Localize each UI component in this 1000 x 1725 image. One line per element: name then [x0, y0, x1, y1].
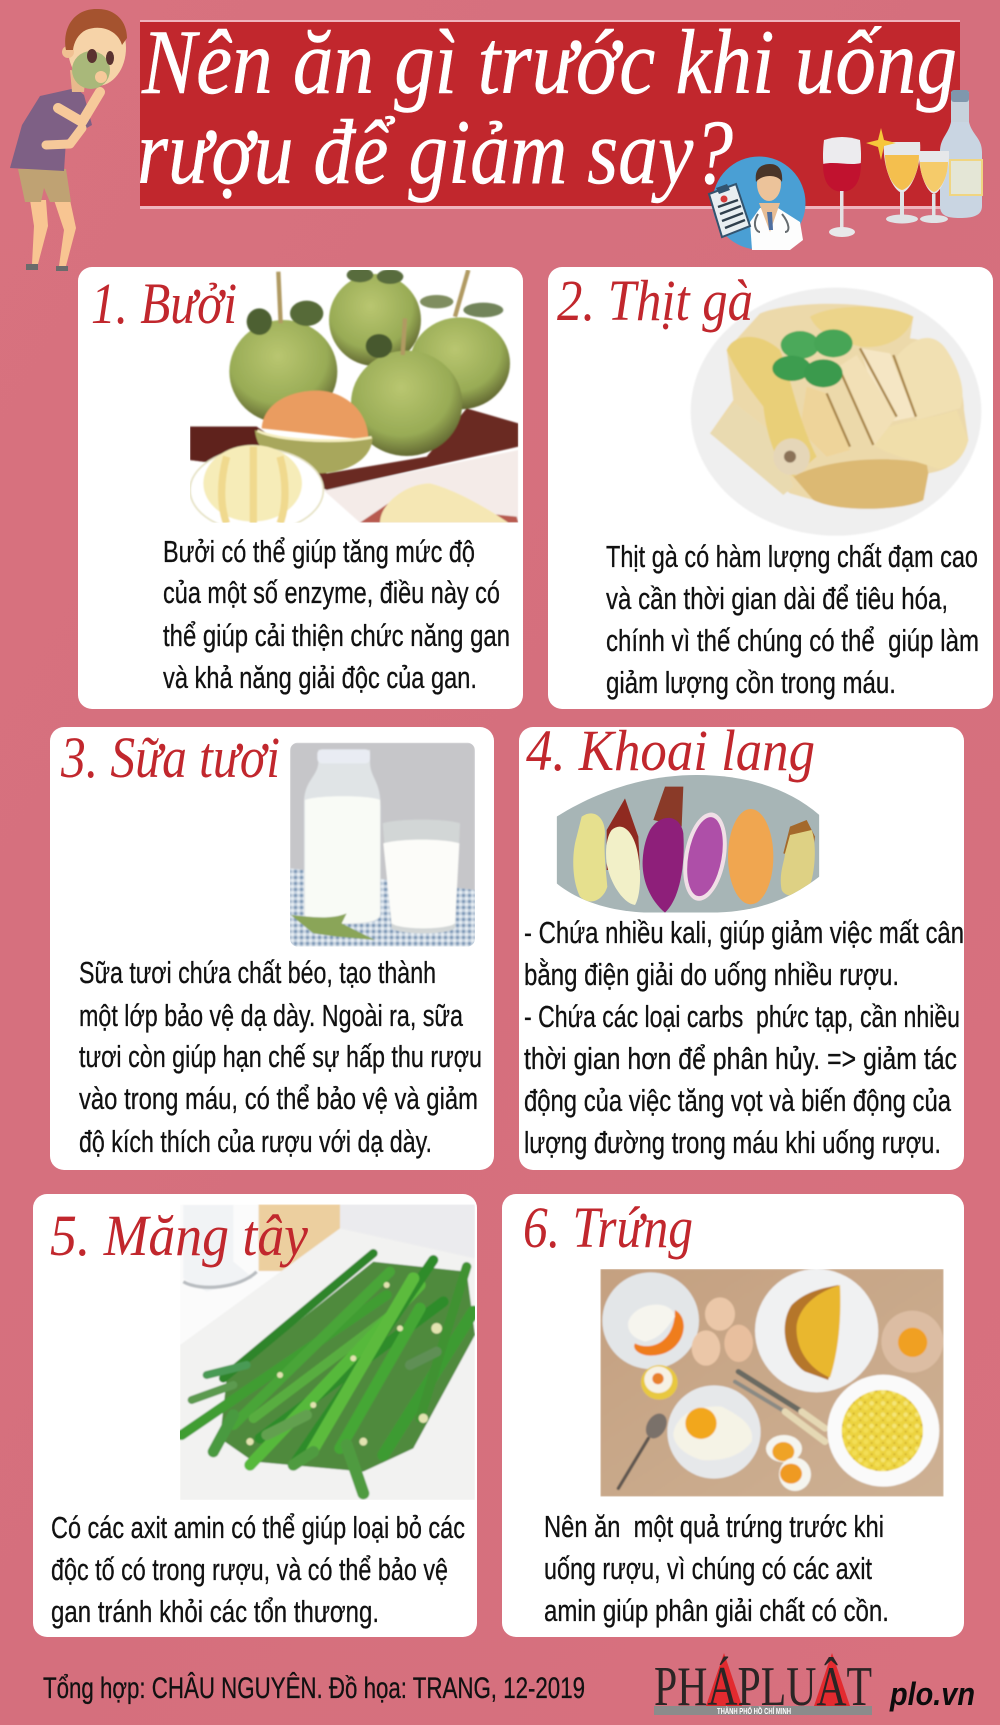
icon: clipboard: [709, 184, 750, 237]
icon: sparkle: [866, 128, 896, 160]
icon: doctor: [709, 156, 806, 250]
title line 2: rượu để giảm say?: [137, 101, 733, 203]
text: Trứng: Nên ăn một quả trứng trước khi: [544, 1509, 884, 1544]
image: eggs: [600, 1269, 944, 1497]
text: Khoai lang: [524, 915, 964, 1160]
icon: wine glass: [823, 137, 861, 237]
title banner: [137, 11, 960, 209]
text: Bưởi: thể giúp cải thiện chức năng gan: [163, 618, 510, 653]
text: Măng tây: độc tố có trong rượu, và có thể bảo vệ: [51, 1552, 448, 1587]
text: Khoai lang: bằng điện giải do uống nhiều rượu.: [524, 957, 899, 992]
text: Trứng: [544, 1509, 889, 1628]
icon: champagne glasses: [866, 128, 949, 224]
heading: Bưởi: 1. Bưởi: [91, 271, 237, 336]
panel: 6 Trứng: [502, 1194, 964, 1637]
text: Thịt gà: giảm lượng cồn trong máu.: [606, 665, 896, 700]
panel: 2 Thịt gà: [548, 267, 993, 709]
heading: Thịt gà: 2. Thịt gà: [557, 268, 753, 333]
heading: Trứng: 6. Trứng: [523, 1195, 693, 1260]
image: pomelos: [190, 268, 518, 532]
text: Sữa tươi: [79, 955, 482, 1159]
text: Bưởi: và khả năng giải độc của gan.: [163, 660, 477, 695]
text: Sữa tươi: độ kích thích của rượu với dạ dày.: [79, 1124, 432, 1159]
heading: Măng tây: 5. Măng tây: [50, 1203, 308, 1268]
icon: bottle: [940, 90, 982, 218]
image: sweet potatoes: [557, 775, 819, 913]
text: Măng tây: gan tránh khỏi các tổn thương.: [51, 1594, 379, 1629]
panel: 4 Khoai lang: [519, 718, 964, 1170]
text: Thịt gà: [606, 539, 979, 700]
panel: 5 Măng tây: [33, 1194, 477, 1637]
logo: Pháp Luật: THÀNH PHỐ HỒ CHÍ MINH: [717, 1706, 791, 1716]
text: Bưởi: Bưởi có thể giúp tăng mức độ: [163, 534, 475, 569]
image: chicken: [691, 288, 981, 536]
text: Măng tây: [51, 1510, 465, 1629]
text: Sữa tươi: Sữa tươi chứa chất béo, tạo thành: [79, 955, 436, 990]
panel: 3 Sữa tươi: [50, 725, 494, 1170]
panel: 1 Bưởi: [78, 267, 523, 709]
icon: sick man: [10, 9, 127, 271]
text: Măng tây: Có các axit amin có thể giúp loại bỏ các: [51, 1510, 465, 1545]
text: Sữa tươi: tươi còn giúp hạn chế sự hấp thu rượu: [79, 1039, 482, 1074]
image: asparagus: [180, 1204, 475, 1500]
text: Bưởi: của một số enzyme, điều này có: [163, 575, 500, 610]
heading: Sữa tươi: 3. Sữa tươi: [60, 725, 280, 790]
logo: plo.vn: plo.vn: [889, 1676, 975, 1712]
text: Sữa tươi: một lớp bảo vệ dạ dày. Ngoài ra, sữa: [79, 998, 464, 1033]
text: Trứng: amin giúp phân giải chất có cồn.: [544, 1593, 889, 1628]
text: Sữa tươi: vào trong máu, có thể bảo vệ và giảm: [79, 1081, 478, 1116]
text: Trứng: uống rượu, vì chúng có các axit: [544, 1551, 872, 1586]
logo: Pháp Luật: PHÁPLUẬT: [654, 1656, 872, 1718]
text: Bưởi: [163, 534, 510, 695]
heading: Khoai lang: 4. Khoai lang: [526, 718, 815, 783]
footer credit: Tổng hợp: CHÂU NGUYÊN. Đồ họa: TRANG, 12-2019: [43, 1672, 585, 1705]
image: milk: [290, 743, 475, 947]
